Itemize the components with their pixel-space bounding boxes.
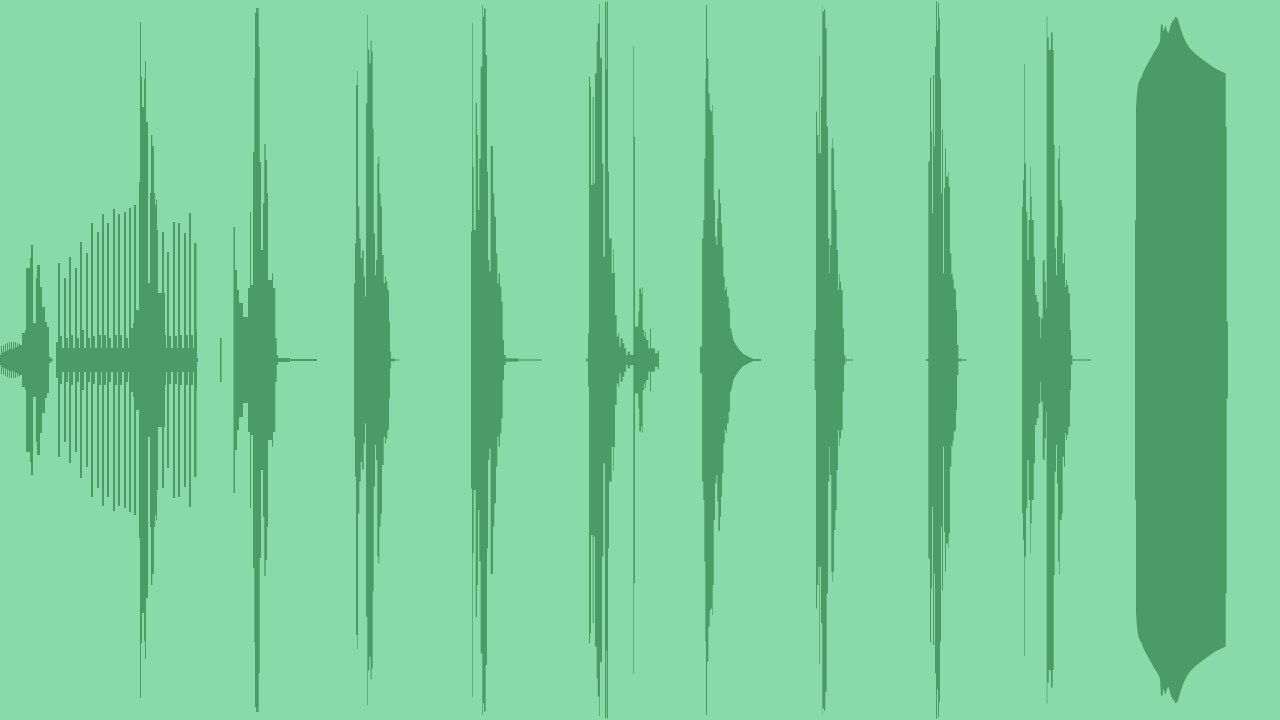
waveform burst 7 [813,5,853,715]
waveform burst 6 with smooth decay [700,5,761,715]
waveform burst 9 [1022,17,1091,703]
waveform tick [220,338,222,382]
waveform burst 5 with double peak [586,2,659,718]
waveform burst 4 [471,5,542,715]
waveform burst 10: sustained block [1135,17,1228,703]
waveform burst 3 [354,15,399,705]
waveform burst 8 [926,1,967,719]
waveform burst 2 [234,8,317,712]
waveform burst: comb pulses with central peak [56,22,198,698]
waveform burst: intro swell [0,245,53,475]
